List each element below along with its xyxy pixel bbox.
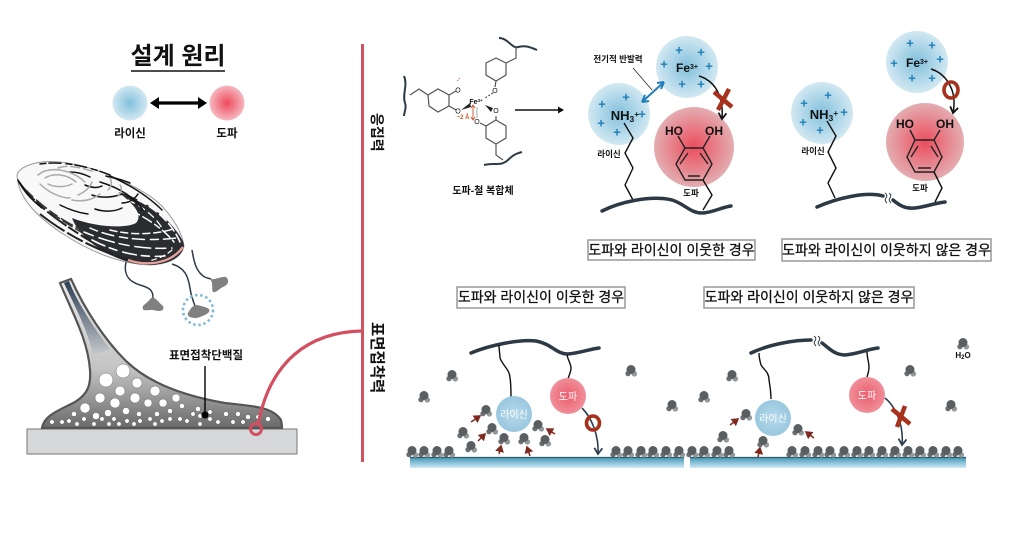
iron ion [656, 36, 718, 98]
polymer backbone [471, 341, 599, 354]
repulsion label and leader: 전기적 반발력 [593, 54, 643, 64]
dopa tether [567, 355, 571, 379]
thread with pad three [192, 250, 228, 292]
thread with pad two [172, 264, 209, 318]
lysine bead: 라이신 [500, 409, 528, 421]
blocked arrow [699, 76, 722, 119]
separated adhesion diagram [698, 336, 957, 457]
lysine ammonium: + [597, 116, 605, 130]
atom labels: O [492, 88, 498, 95]
iron ion: + [697, 76, 705, 92]
caption: separated adhesion: 도파와 라이신이 이웃하지 않은 경우 [705, 289, 913, 305]
adhesive plaque [42, 279, 282, 428]
dotted highlight circle [183, 295, 213, 325]
dopa approach arrow [885, 398, 902, 445]
polymer backbone with break [751, 336, 878, 355]
double arrow [150, 97, 207, 109]
atom labels: 3+ [478, 98, 483, 103]
dopa catechol: OH [705, 124, 723, 138]
plaque protein label with pointer: 표면접착단백질 [169, 348, 243, 362]
icon: mussel shell [17, 162, 186, 266]
lysine ammonium: + [800, 96, 808, 110]
dopa bead: 도파 [559, 391, 577, 403]
dopa side chain [934, 172, 942, 202]
red cross [714, 89, 732, 110]
dopa tether [867, 352, 869, 377]
red connector and axis [250, 44, 362, 462]
catechol rings [410, 47, 516, 160]
red circle mark [944, 82, 958, 98]
lysine ammonium: + [799, 114, 807, 130]
dopa catechol: HO [665, 124, 683, 138]
lysine ammonium: 3 [829, 113, 834, 123]
iron ion: + [890, 56, 898, 70]
polymer backbone [602, 198, 731, 213]
atom labels: Fe [469, 99, 478, 106]
red circle mark [586, 416, 600, 430]
iron ion: + [908, 70, 916, 86]
iron ion: + [660, 56, 668, 72]
red cross [892, 406, 910, 427]
lysine label: 라이신 [597, 149, 621, 159]
axis label: cohesion: 응집력 [369, 113, 385, 152]
lysine ammonium: + [816, 122, 824, 138]
plaque bubbles [50, 364, 270, 426]
dopa side chain [703, 180, 712, 210]
iron ion: + [906, 36, 914, 50]
plaque protein label with pointer [169, 348, 243, 418]
dopa label: 도파 [683, 188, 699, 198]
dopa-iron complex diagram [404, 38, 537, 197]
dopa catechol: HO [896, 117, 914, 131]
displacement arrows [730, 419, 814, 457]
water legend [955, 338, 971, 361]
lysine ammonium [791, 82, 853, 144]
caption: neighbouring adhesion: 도파와 라이신이 이웃한 경우 [458, 289, 624, 305]
displacement arrows [471, 416, 555, 456]
iron ion: + [705, 58, 713, 74]
surface with water: separated [686, 446, 966, 468]
wedge bonds [461, 103, 493, 112]
caption: separated cohesion: 도파와 라이신이 이웃하지 않은 경우 [782, 242, 991, 258]
dopa label: 도파 [912, 183, 928, 193]
atom labels: O [455, 88, 461, 94]
dopa catechol [886, 103, 964, 181]
icon: byssus threads and pads [125, 250, 228, 325]
lysine side chain [827, 121, 836, 198]
lysine bead [496, 396, 532, 432]
neighbouring cohesion diagram [588, 36, 734, 213]
lysine bead [755, 400, 791, 436]
lysine ammonium: + [598, 96, 606, 112]
iron ion: + [678, 76, 686, 92]
lysine circle [112, 86, 148, 120]
iron ion: + [675, 42, 683, 58]
complex label: 도파-철 복합체 [452, 184, 514, 197]
iron ion: Fe [906, 56, 920, 70]
dopa bead [849, 377, 885, 413]
lysine ammonium: + [634, 109, 639, 119]
lysine ammonium: NH [810, 107, 829, 122]
substrate base [27, 429, 297, 454]
dopa circle [210, 86, 244, 120]
iron ion: + [936, 52, 944, 66]
iron ion: + [928, 38, 936, 52]
lysine ammonium: 3 [630, 114, 635, 124]
lysine ammonium: + [824, 88, 832, 102]
thread with pad one [125, 262, 163, 311]
backbones [404, 38, 537, 165]
allowed arrow [931, 69, 954, 113]
water legend: O [964, 351, 971, 360]
axis label: surface adhesion: 표면접착력 [368, 322, 386, 393]
repulsion label and leader [593, 54, 652, 90]
lysine ammonium: + [613, 124, 621, 140]
iron ion: Fe [676, 61, 690, 75]
lysine label: 라이신 [114, 127, 146, 140]
lysine ammonium: + [833, 108, 838, 118]
lysine ammonium [588, 83, 650, 145]
dopa catechol [654, 107, 734, 187]
surface with water: neighbouring [406, 446, 685, 468]
atom labels: O [455, 108, 461, 116]
water molecules [418, 365, 678, 453]
dopa label: 도파 [216, 127, 238, 140]
dopa catechol: OH [936, 117, 954, 131]
legend: lysine and dopa [112, 86, 244, 140]
water molecules [698, 365, 957, 448]
arrow to repulsion diagram [515, 109, 563, 111]
lysine ammonium: + [638, 106, 646, 122]
iron ion: 3+ [690, 64, 698, 71]
iron ion: 3+ [920, 59, 928, 66]
orange distance marker: ~2 Å [457, 114, 470, 121]
repulsion double arrow [642, 82, 664, 102]
atom labels [455, 88, 499, 126]
lysine ammonium: + [840, 104, 848, 120]
separated cohesion diagram [791, 31, 964, 208]
atom labels: O [474, 119, 480, 126]
title: 설계 원리 [130, 43, 226, 70]
lysine label: 라이신 [801, 146, 825, 156]
lysine tether [759, 353, 771, 399]
water legend: 2 [961, 355, 965, 361]
iron ion: + [928, 70, 936, 86]
lysine ammonium: NH [611, 108, 630, 123]
dopa bead [550, 378, 586, 414]
caption: neighbouring cohesion: 도파와 라이신이 이웃한 경우 [588, 242, 755, 258]
iron ion [886, 31, 948, 93]
lysine side chain [624, 123, 633, 200]
lysine bead: 라이신 [759, 413, 787, 425]
atom labels: O [493, 108, 499, 115]
water legend: H [955, 351, 961, 360]
dopa bead: 도파 [858, 390, 876, 402]
polymer backbone with break [817, 193, 945, 208]
neighbouring adhesion diagram [418, 341, 678, 456]
dopa approach arrow [582, 408, 598, 454]
lysine ammonium: + [622, 90, 630, 104]
orange distance marker [457, 78, 477, 121]
iron ion: + [697, 44, 705, 60]
lysine tether [499, 345, 511, 397]
